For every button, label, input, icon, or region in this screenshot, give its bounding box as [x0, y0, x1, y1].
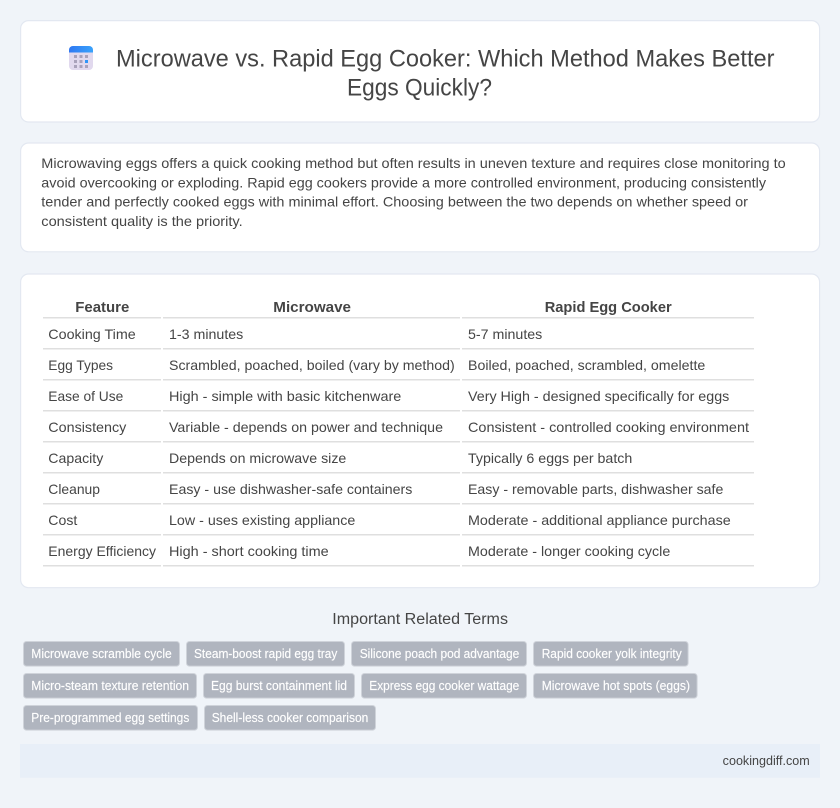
intro paragraph — [41, 155, 786, 229]
row: ease of use: Ease of Use — [48, 388, 124, 404]
tag: Rapid cooker yolk integrity — [542, 647, 682, 661]
tag — [204, 674, 354, 698]
title: Eggs Quickly? — [347, 74, 492, 102]
row: energy efficiency: High - short cooking time — [169, 543, 329, 559]
tag: Express egg cooker wattage — [369, 679, 519, 693]
row: egg types — [48, 357, 706, 373]
row: energy efficiency: Energy Efficiency — [48, 543, 156, 559]
tag — [24, 642, 180, 666]
intro paragraph: tender and perfectly cooked eggs with minimal effort. Choosing between the two depends on whether speed or — [41, 194, 748, 210]
row: cleanup: Easy - use dishwasher-safe containers — [169, 481, 412, 497]
tag: Egg burst containment lid — [211, 679, 347, 693]
related term tags — [24, 642, 697, 730]
icon: calendar grid — [69, 46, 93, 70]
row: ease of use: High - simple with basic kitchenware — [169, 388, 402, 404]
row: cleanup: Cleanup — [48, 481, 100, 497]
row: capacity: Depends on microwave size — [169, 450, 347, 466]
row: cost — [48, 512, 731, 528]
footer source text: cookingdiff.com — [723, 754, 810, 768]
row: egg types: Egg Types — [48, 357, 113, 373]
panel: title header — [21, 21, 820, 122]
tag: Silicone poach pod advantage — [360, 647, 519, 661]
row: cooking time — [48, 326, 542, 342]
title — [116, 46, 774, 102]
tag: Micro-steam texture retention — [31, 679, 189, 693]
heading: important related terms: Important Related Terms — [332, 611, 508, 628]
row: consistency: Consistent - controlled cooking environment — [468, 419, 749, 435]
table header row: Rapid Egg Cooker — [545, 299, 672, 316]
tag: Shell-less cooker comparison — [212, 711, 368, 725]
tag — [186, 642, 344, 666]
row: consistency: Variable - depends on power and technique — [169, 419, 443, 435]
intro paragraph: Microwaving eggs offers a quick cooking method but often results in uneven texture and requires close monitoring to — [41, 155, 786, 171]
tag: Microwave hot spots (eggs) — [542, 679, 690, 693]
row: ease of use: Very High - designed specifically for eggs — [468, 388, 729, 404]
table header row — [75, 299, 672, 316]
row: cooking time: 1-3 minutes — [169, 326, 243, 342]
row: capacity: Capacity — [48, 450, 103, 466]
row: cost: Moderate - additional appliance purchase — [468, 512, 731, 528]
title: Microwave vs. Rapid Egg Cooker: Which Method Makes Better — [116, 46, 774, 72]
tag: Microwave scramble cycle — [31, 647, 172, 661]
tag — [204, 706, 376, 730]
tag — [24, 674, 196, 698]
panel: intro text — [21, 143, 820, 252]
tag: Steam-boost rapid egg tray — [194, 647, 338, 661]
row: capacity: Typically 6 eggs per batch — [468, 450, 632, 466]
tag — [534, 642, 688, 666]
row: capacity — [48, 450, 632, 466]
tag — [24, 706, 198, 730]
intro paragraph: avoid overcooking or exploding. Rapid egg cookers provide a more controlled environment, producing consistently — [41, 174, 766, 190]
footer — [20, 744, 820, 778]
row: cleanup: Easy - removable parts, dishwasher safe — [468, 481, 724, 497]
intro paragraph: consistent quality is the priority. — [41, 213, 243, 229]
row: cooking time: 5-7 minutes — [468, 326, 542, 342]
tag — [534, 674, 697, 698]
row: ease of use — [48, 388, 729, 404]
row: energy efficiency — [48, 543, 671, 559]
row: cost: Cost — [48, 512, 77, 528]
row: consistency: Consistency — [48, 419, 126, 435]
tag — [352, 642, 526, 666]
row: egg types: Boiled, poached, scrambled, omelette — [468, 357, 706, 373]
row: consistency — [48, 419, 749, 435]
table header row: Feature — [75, 299, 129, 316]
row: egg types: Scrambled, poached, boiled (vary by method) — [169, 357, 455, 373]
tag — [362, 674, 526, 698]
tag: Pre-programmed egg settings — [31, 711, 189, 725]
row: energy efficiency: Moderate - longer cooking cycle — [468, 543, 671, 559]
table header row: Microwave — [273, 299, 351, 316]
row: cooking time: Cooking Time — [48, 326, 136, 342]
panel: comparison table — [21, 274, 820, 588]
row: cost: Low - uses existing appliance — [169, 512, 356, 528]
row: cleanup — [48, 481, 724, 497]
